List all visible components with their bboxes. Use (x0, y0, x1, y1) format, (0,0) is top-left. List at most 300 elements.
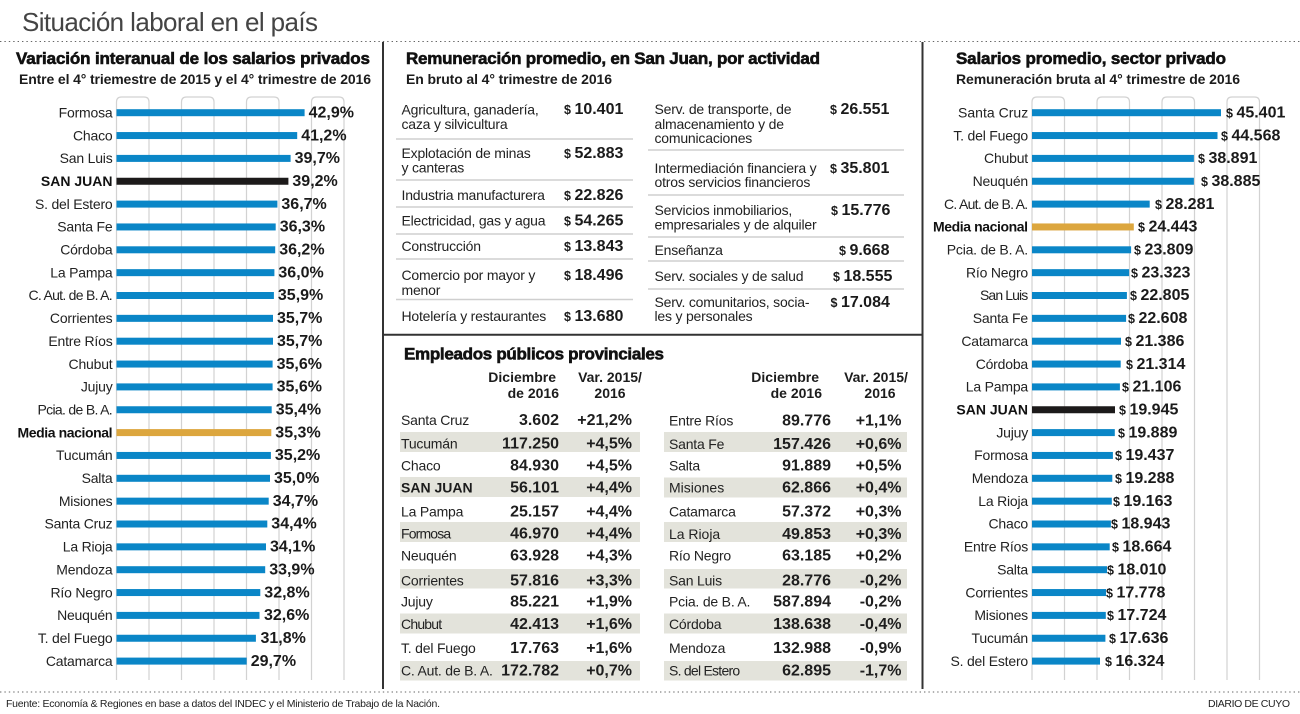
row: servicios sociales: Serv. sociales y de salud (654, 268, 803, 284)
row: Entre Ríos: Entre Ríos (669, 412, 733, 428)
row: minas: Explotación de minas (402, 145, 531, 161)
row: Chubut (401, 616, 632, 633)
row: Jujuy (996, 424, 1177, 441)
row: Mendoza: 132.988 (773, 640, 831, 657)
row: Formosa: Formosa (974, 447, 1028, 463)
row: Chubut: $ 38.891 (1198, 150, 1257, 167)
row: Jujuy: 35,6% (277, 379, 322, 396)
row: Neuquén: Neuquén (401, 548, 456, 564)
row: Entre Ríos: 35,7% (277, 333, 322, 350)
row: C. Aut. de B. A.: C. Aut. de B. A. (944, 196, 1028, 212)
row: intermediación financiera: Intermediación financiera y (654, 160, 817, 176)
row: Chubut: 35,6% (277, 356, 322, 373)
row: Misiones: 34,7% (273, 493, 318, 510)
row: Catamarca: +0,3% (856, 504, 902, 520)
row: Tucumán: 35,2% (275, 447, 320, 464)
row: Formosa: 42,9% (309, 104, 354, 121)
row: enseñanza: $ 9.668 (839, 242, 890, 259)
row: minas (402, 145, 623, 176)
row: San Juan: 39,2% (292, 173, 338, 190)
row: Corrientes: Corrientes (401, 572, 464, 588)
heading: empleados públicos: Empleados públicos provinciales (404, 344, 664, 364)
row: construcción (402, 238, 623, 255)
row: Pcia. de B. A.: Pcia. de B. A. (947, 242, 1028, 258)
row: Neuquén: 63.928 (510, 548, 559, 564)
row: transporte: Serv. de transporte, de (654, 101, 792, 117)
row: Misiones: $ 17.724 (1107, 607, 1166, 624)
row: Santa Fe (669, 436, 902, 453)
row: San Luis: San Luis (60, 150, 113, 166)
row: Formosa: Formosa (401, 526, 451, 542)
row: Córdoba: 138.638 (773, 616, 831, 633)
row: Santa Cruz: $ 45.401 (1226, 104, 1285, 121)
row: industria: $ 22.826 (564, 187, 623, 204)
row: Chubut (984, 150, 1257, 167)
row: Santa Fe: Santa Fe (57, 219, 113, 235)
row: Misiones: Misiones (974, 607, 1028, 623)
row: Tucumán: +4,5% (586, 436, 632, 452)
row: Santa Fe: 36,3% (280, 219, 325, 236)
row: Río Negro: 63.185 (782, 548, 831, 564)
row: Chubut: 42.413 (510, 616, 559, 633)
row: construcción: Construcción (402, 238, 481, 254)
row: San Juan: 56.101 (510, 480, 559, 497)
row: Río Negro (669, 548, 902, 564)
row: Catamarca (961, 333, 1184, 350)
row: servicios inmobiliarios: $ 15.776 (831, 202, 890, 219)
row: Corrientes: Corrientes (50, 310, 113, 326)
row: Mendoza: $ 19.288 (1115, 470, 1174, 487)
row: La Rioja: +0,3% (856, 526, 902, 543)
row: intermediación financiera (654, 160, 889, 190)
row: Río Negro: $ 23.323 (1131, 264, 1190, 281)
row: Chaco: Chaco (989, 516, 1028, 532)
title: Situación laboral en el país (22, 7, 318, 37)
row: Misiones (974, 607, 1166, 624)
row: San Luis: San Luis (669, 572, 722, 588)
row: Media nacional: Media nacional (18, 424, 112, 440)
row: electricidad: $ 54.265 (564, 212, 623, 230)
bar chart: salario por provincia (933, 104, 1285, 670)
row: Entre Ríos: $ 18.664 (1112, 539, 1171, 556)
row: La Pampa: La Pampa (966, 379, 1028, 395)
row: Chaco: +4,5% (586, 458, 632, 474)
row: Corrientes: $ 17.778 (1106, 584, 1165, 601)
row: San Juan (401, 480, 632, 497)
row: T. del Fuego: $ 44.568 (1221, 127, 1280, 144)
row: electricidad (402, 212, 623, 230)
row: Tucumán: Tucumán (401, 436, 457, 452)
row: La Rioja: 34,1% (270, 539, 315, 556)
row: agricultura: Agricultura, ganadería, (402, 102, 539, 118)
row: Chaco (401, 458, 632, 474)
row: Santa Cruz: 34,4% (271, 516, 317, 533)
row: Neuquén (57, 607, 309, 624)
panel: empleados públicos provinciales (400, 344, 908, 680)
row: Catamarca: Catamarca (961, 333, 1028, 349)
row: Media nacional (18, 424, 321, 441)
row: S. del Estero: S. del Estero (669, 662, 740, 678)
row: Formosa (401, 526, 632, 542)
row: Santa Cruz: Santa Cruz (401, 412, 469, 428)
column headers: left table: 2016 (594, 385, 626, 401)
row: Pcia. de B. A.: Pcia. de B. A. (38, 401, 112, 417)
row: San Luis (60, 150, 340, 167)
row: La Rioja (978, 493, 1172, 510)
row: Jujuy: Jujuy (401, 594, 433, 610)
row: Catamarca: Catamarca (669, 504, 736, 520)
row: Pcia. de B. A.: 587.894 (773, 594, 831, 610)
row: Jujuy: 85.221 (510, 594, 559, 610)
panel: salarios promedio sector privado (933, 49, 1285, 680)
row: Corrientes (401, 572, 632, 590)
row: San Juan: SAN JUAN (401, 480, 473, 496)
row: Neuquén: Neuquén (973, 173, 1028, 189)
row: Misiones: Misiones (59, 493, 113, 509)
row: La Rioja: La Rioja (978, 493, 1028, 509)
row: Salta (997, 561, 1166, 578)
column headers: left table: Var. 2015/ (578, 369, 642, 385)
row: C. Aut. de B. A.: +0,7% (586, 662, 632, 680)
row: La Rioja: 49.853 (782, 526, 831, 543)
row: Córdoba: -0,4% (860, 616, 902, 633)
row: San Luis: 39,7% (295, 150, 340, 167)
row: La Pampa: $ 21.106 (1122, 379, 1181, 396)
row: Tucumán (972, 630, 1168, 647)
subheading: remuneración bruta: Remuneración bruta al 4° trimestre de 2016 (956, 71, 1240, 87)
row: San Juan: SAN JUAN (956, 401, 1028, 417)
row: Santa Fe: Santa Fe (669, 436, 725, 452)
row: Santa Fe: $ 22.608 (1128, 310, 1187, 327)
row: Formosa: $ 19.437 (1115, 447, 1174, 464)
subheading: en bruto: En bruto al 4° trimestre de 2016 (406, 71, 612, 87)
row: Entre Ríos (48, 333, 322, 350)
row: Neuquén (973, 173, 1260, 190)
row: San Luis: $ 22.805 (1130, 287, 1189, 304)
column headers: right table: de 2016 (771, 385, 822, 401)
row: Santa Cruz (401, 412, 632, 429)
panel: variación interanual de salarios privados (16, 49, 371, 680)
row: Córdoba (976, 356, 1185, 373)
row: agricultura (402, 101, 623, 132)
row: intermediación financiera: otros servicios financieros (654, 174, 810, 190)
row: Córdoba: 36,2% (279, 242, 325, 259)
row: Chubut: Chubut (401, 616, 442, 632)
row: Tucumán: Tucumán (972, 630, 1028, 646)
row: Salta (82, 470, 319, 487)
row: hotelería (402, 308, 623, 325)
row: Neuquén: 32,6% (264, 607, 309, 624)
row: Jujuy: Jujuy (81, 379, 113, 395)
row: Tucumán: $ 17.636 (1109, 630, 1168, 647)
row: T. del Fuego: T. del Fuego (401, 640, 476, 656)
row: Neuquén: Neuquén (57, 607, 112, 623)
row: Corrientes (965, 584, 1165, 601)
row: industria (402, 187, 623, 204)
row: Corrientes (50, 310, 322, 327)
row: Río Negro: Río Negro (966, 264, 1028, 280)
row: enseñanza: Enseñanza (654, 242, 723, 258)
row: transporte (654, 101, 889, 146)
row: S. del Estero (950, 653, 1164, 670)
column headers: right table (751, 369, 908, 401)
row: Media nacional: Media nacional (933, 219, 1028, 235)
row: T. del Fuego: +1,6% (586, 640, 632, 657)
row: Tucumán (56, 447, 320, 464)
row: La Rioja: La Rioja (63, 539, 113, 555)
row: Río Negro: +0,2% (856, 548, 902, 564)
row: Corrientes: Corrientes (965, 584, 1028, 600)
row: San Juan: SAN JUAN (41, 173, 112, 189)
row: La Rioja (669, 526, 902, 543)
row: San Luis (669, 572, 902, 590)
heading: salarios promedio: Salarios promedio, sector privado (956, 49, 1226, 68)
row: C. Aut. de B. A.: C. Aut. de B. A. (401, 662, 493, 678)
row: servicios comunitarios: les y personales (654, 308, 753, 324)
row: Pcia. de B. A.: Pcia. de B. A. (669, 594, 750, 610)
row: Formosa: Formosa (59, 104, 113, 120)
row: San Luis: 28.776 (782, 572, 831, 590)
row: Santa Fe: Santa Fe (973, 310, 1028, 326)
row: San Juan: $ 19.945 (1119, 401, 1178, 418)
row: Chaco: 41,2% (301, 127, 347, 144)
row: Salta (669, 458, 902, 474)
row: La Pampa: +4,4% (586, 504, 632, 520)
row: T. del Fuego (38, 630, 306, 647)
row: Pcia. de B. A. (669, 594, 902, 610)
row: Salta: +0,5% (856, 458, 902, 474)
row: Córdoba: Córdoba (669, 616, 722, 632)
row: La Pampa (966, 379, 1181, 396)
row: T. del Fuego (401, 640, 632, 657)
row: Salta: 91.889 (782, 458, 831, 474)
row: Entre Ríos (669, 412, 902, 430)
row: Misiones: +0,4% (856, 480, 902, 497)
row: Neuquén: $ 38.885 (1201, 173, 1260, 190)
row: Chubut: Chubut (69, 356, 113, 372)
row: C. Aut. de B. A.: 172.782 (501, 662, 559, 680)
row: Formosa: 46.970 (510, 526, 559, 542)
row: San Juan (41, 173, 338, 190)
row: Corrientes: +3,3% (586, 572, 632, 590)
row: Tucumán: Tucumán (56, 447, 112, 463)
row: T. del Fuego: T. del Fuego (38, 630, 113, 646)
column headers: right table: Var. 2015/ (844, 369, 908, 385)
row: Córdoba: Córdoba (976, 356, 1028, 372)
panel: remuneración promedio por actividad (396, 49, 904, 325)
row: Chaco: 84.930 (510, 458, 559, 474)
row: transporte: comunicaciones (654, 130, 752, 146)
row: hotelería: Hotelería y restaurantes (402, 308, 546, 324)
row: La Pampa: 25.157 (510, 504, 559, 520)
row: Catamarca: 29,7% (251, 653, 296, 670)
row: Entre Ríos: Entre Ríos (964, 539, 1028, 555)
row: Córdoba (669, 616, 902, 633)
row: Santa Fe (973, 310, 1187, 327)
row: construcción: $ 13.843 (564, 238, 623, 255)
row: Neuquén (401, 548, 632, 564)
row: Río Negro (50, 584, 310, 601)
row: Misiones (669, 480, 902, 497)
row: Misiones: 62.866 (782, 480, 831, 497)
column headers: left table (488, 369, 642, 401)
row: Mendoza: Mendoza (972, 470, 1028, 486)
row: servicios sociales (654, 268, 892, 285)
row: servicios inmobiliarios (654, 202, 890, 232)
row: Mendoza: Mendoza (56, 561, 113, 577)
row: minas: $ 52.883 (564, 145, 623, 162)
row: La Rioja: $ 19.163 (1113, 493, 1172, 510)
row: San Luis: -0,2% (860, 572, 902, 590)
row: electricidad: Electricidad, gas y agua (402, 212, 546, 228)
row: Catamarca: $ 21.386 (1125, 333, 1184, 350)
row: Salta: $ 18.010 (1107, 561, 1166, 578)
row: hotelería: $ 13.680 (564, 308, 623, 325)
row: Salta: Salta (997, 561, 1028, 577)
row: intermediación financiera: $ 35.801 (830, 160, 889, 177)
row: comercio: Comercio por mayor y (402, 267, 535, 283)
row: Río Negro: Río Negro (50, 584, 113, 600)
row: servicios comunitarios: $ 17.084 (830, 294, 890, 311)
row: San Luis (980, 287, 1189, 304)
row: Mendoza (56, 561, 315, 578)
row: agricultura: caza y silvicultura (402, 116, 508, 132)
row: Tucumán (401, 436, 632, 452)
row: Salta: 35,0% (274, 470, 319, 487)
row: Entre Ríos: 89.776 (782, 412, 831, 430)
row: S. del Estero: 62.895 (782, 662, 831, 680)
row: C. Aut. de B. A. (944, 196, 1214, 213)
row: Córdoba: Córdoba (60, 242, 113, 258)
row: Corrientes: 57.816 (510, 572, 559, 590)
row: La Pampa (50, 264, 324, 281)
row: C. Aut. de B. A.: C. Aut. de B. A. (28, 287, 112, 303)
row: S. del Estero: -1,7% (860, 662, 902, 680)
row: Chubut (69, 356, 322, 373)
row: S. del Estero: S. del Estero (950, 653, 1028, 669)
row: Santa Fe: +0,6% (856, 436, 902, 453)
row: San Luis: San Luis (980, 287, 1028, 303)
row: Jujuy: +1,9% (586, 594, 632, 610)
row: La Pampa: La Pampa (50, 264, 113, 280)
column headers: left table: Diciembre (488, 369, 556, 385)
row: C. Aut. de B. A.: $ 28.281 (1155, 196, 1214, 213)
row: enseñanza (654, 242, 890, 259)
row: T. del Fuego: 17.763 (510, 640, 559, 657)
column headers: left table: de 2016 (508, 385, 559, 401)
row: servicios inmobiliarios: empresariales y de alquiler (654, 216, 817, 232)
row: Mendoza: 33,9% (269, 561, 315, 578)
row: Formosa (59, 104, 354, 121)
row: Catamarca (46, 653, 296, 670)
row: La Rioja (63, 539, 315, 556)
row: La Pampa (401, 504, 632, 520)
row: Chubut: Chubut (984, 150, 1028, 166)
row: C. Aut. de B. A. (28, 287, 323, 304)
row: Media nacional: $ 24.443 (1138, 219, 1197, 236)
row: Jujuy (401, 594, 632, 610)
row: Media nacional (933, 219, 1197, 236)
row: Santa Cruz: Santa Cruz (958, 104, 1028, 120)
row: Salta: Salta (669, 458, 700, 474)
row: Mendoza (669, 640, 902, 657)
row: Pcia. de B. A. (947, 242, 1193, 258)
row: Santa Cruz (44, 516, 317, 533)
row: Catamarca: 57.372 (782, 504, 831, 520)
row: Mendoza: -0,9% (860, 640, 902, 657)
row: Neuquén: +4,3% (586, 548, 632, 564)
row: transporte: almacenamiento y de (654, 116, 784, 132)
heading: remuneración promedio: Remuneración promedio, en San Juan, por actividad (406, 49, 820, 68)
row: servicios sociales: $ 18.555 (833, 268, 892, 285)
row: Chaco: Chaco (73, 127, 113, 143)
credit: DIARIO DE CUYO (1208, 698, 1290, 710)
row: Mendoza: Mendoza (669, 640, 726, 656)
row: Chaco (73, 127, 347, 144)
row: Catamarca (669, 504, 902, 520)
row: servicios inmobiliarios: Servicios inmobiliarios, (654, 202, 792, 218)
subheading: periodo: Entre el 4° triemestre de 2015 y el 4° trimestre de 2016 (19, 71, 371, 87)
row: comercio: $ 18.496 (564, 267, 623, 284)
row: Pcia. de B. A.: $ 23.809 (1134, 242, 1193, 259)
row: Media nacional: 35,3% (275, 424, 321, 441)
row: Formosa: +4,4% (586, 526, 632, 542)
row: Chaco: Chaco (401, 458, 441, 474)
heading: variación interanual: Variación interanual de los salarios privados (16, 49, 370, 68)
row: transporte: $ 26.551 (830, 101, 889, 118)
row: Santa Cruz: +21,2% (577, 412, 632, 429)
row: Santa Cruz: Santa Cruz (44, 516, 113, 532)
row: Córdoba: $ 21.314 (1126, 356, 1185, 373)
row: Mendoza (972, 470, 1174, 487)
row: Córdoba (60, 242, 325, 258)
row: Santa Fe (57, 219, 325, 236)
row: La Pampa: 36,0% (278, 264, 324, 281)
row: servicios comunitarios (654, 294, 890, 324)
row: S. del Estero: S. del Estero (35, 196, 113, 212)
row: Salta: Salta (82, 470, 113, 486)
row: Misiones (59, 493, 318, 510)
row: Santa Cruz: 3.602 (519, 412, 559, 429)
column headers: right table: 2016 (864, 385, 896, 401)
row: Pcia. de B. A.: -0,2% (860, 594, 902, 610)
row: S. del Estero (669, 662, 902, 680)
row: C. Aut. de B. A.: 35,9% (278, 287, 323, 304)
row: comercio (402, 267, 623, 298)
row: La Pampa: La Pampa (401, 504, 464, 520)
row: Catamarca: Catamarca (46, 653, 113, 669)
row: Pcia. de B. A. (38, 401, 321, 418)
row: T. del Fuego (953, 127, 1280, 144)
row: Entre Ríos (964, 539, 1171, 556)
row: T. del Fuego: T. del Fuego (953, 127, 1028, 143)
row: Santa Cruz (958, 104, 1285, 121)
source note: Fuente: Economía & Regiones en base a datos del INDEC y el Ministerio de Trabajo de la Nación. (6, 698, 440, 710)
row: San Juan (956, 401, 1178, 418)
row: Formosa (974, 447, 1174, 464)
row: servicios comunitarios: Serv. comunitarios, socia- (654, 294, 810, 310)
row: C. Aut. de B. A. (401, 662, 632, 680)
row: La Rioja: La Rioja (669, 526, 720, 542)
bar chart: variación por provincia (18, 104, 354, 670)
row: Santa Fe: 157.426 (773, 436, 831, 453)
row: San Juan: +4,4% (586, 480, 632, 497)
row: Río Negro: Río Negro (669, 548, 731, 564)
row: S. del Estero: $ 16.324 (1105, 653, 1164, 670)
row: Río Negro (966, 264, 1190, 281)
row: Pcia. de B. A.: 35,4% (276, 401, 321, 418)
row: Tucumán: 117.250 (502, 436, 559, 452)
